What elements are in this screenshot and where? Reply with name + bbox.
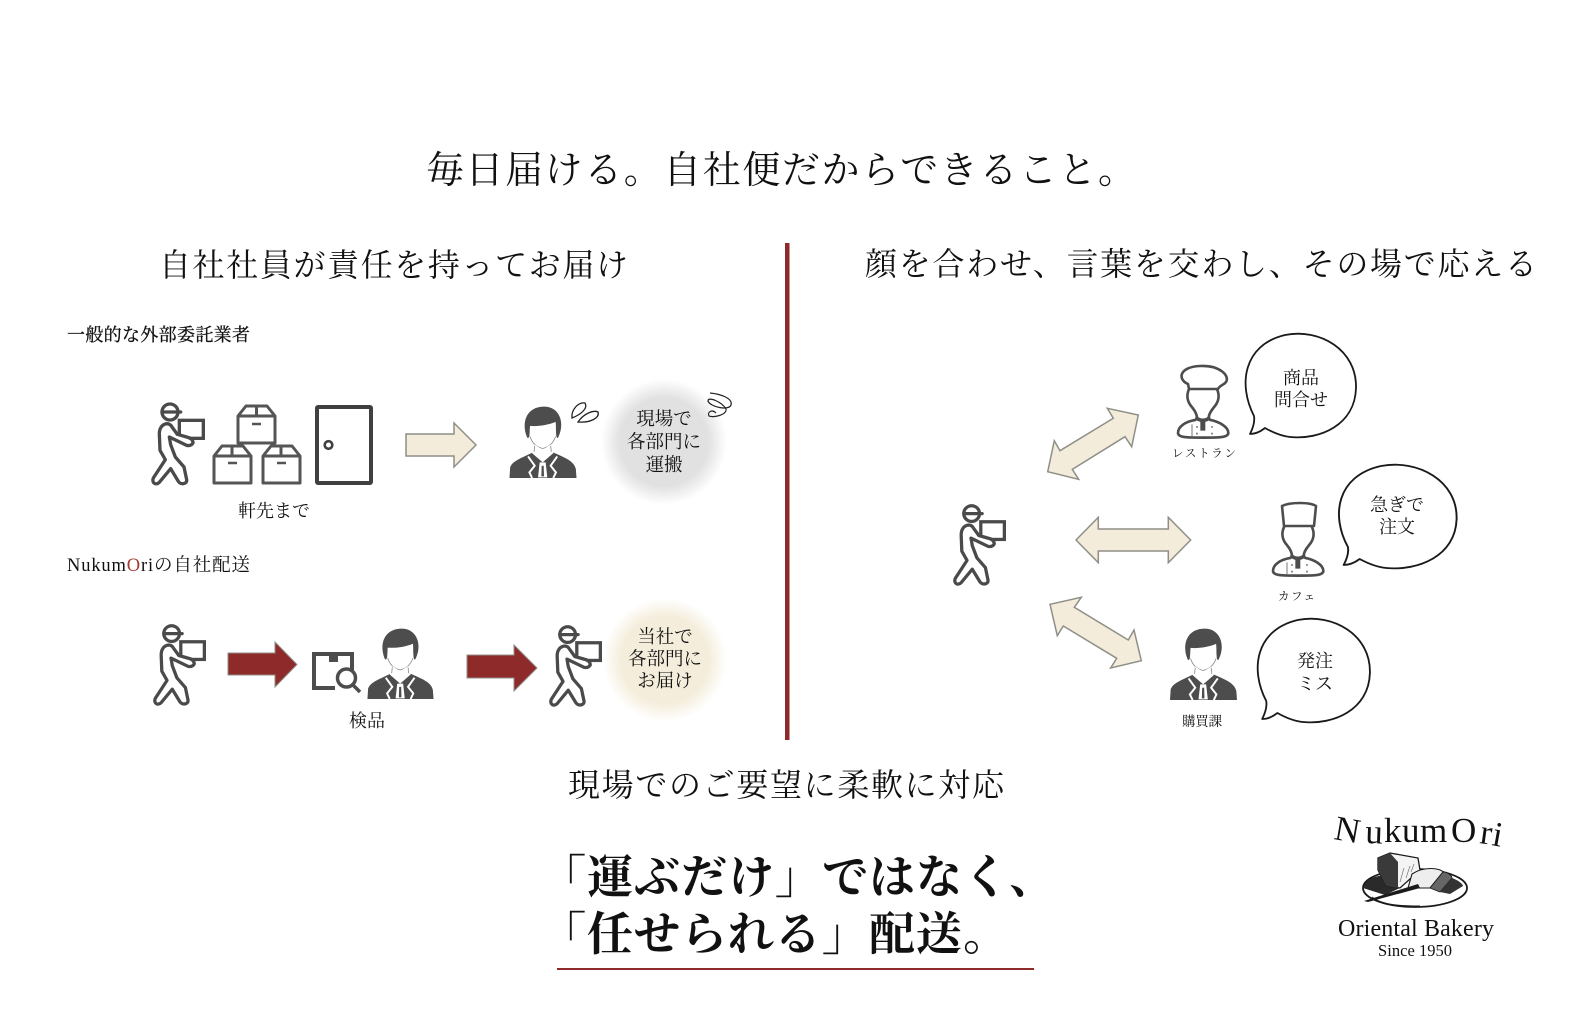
logo wordmark: r [1478, 812, 1495, 853]
headline: 「運ぶだけ」ではなく、 [540, 841, 1056, 907]
icon: delivery worker [551, 627, 600, 705]
bubble: beige deliver to each department: 当社で [637, 623, 693, 649]
caption: inspection: 検品 [349, 707, 385, 733]
divider: red vertical line [785, 243, 790, 740]
headline [540, 841, 1056, 964]
icon: sweat marks [572, 403, 598, 422]
bubble: order error [1258, 619, 1370, 722]
logo wordmark: O [1451, 811, 1476, 850]
underline [557, 968, 1034, 970]
bubble: grey carry to each department: 各部門に [627, 428, 701, 454]
icon: stacked boxes [214, 406, 300, 483]
arrow: to purchasing [1050, 597, 1141, 668]
caption: restaurant: レストラン [1172, 445, 1236, 461]
icon: cafe chef [1273, 503, 1323, 576]
bubble: order error: ミス [1297, 670, 1333, 696]
logo illustration: bread on board [1363, 853, 1467, 907]
arrow: cream [406, 423, 476, 467]
arrow: to restaurant [1048, 408, 1138, 479]
icon: inspector [367, 629, 434, 699]
bubble: grey carry to each department: 運搬 [645, 451, 683, 477]
bubble: beige deliver to each department [603, 598, 727, 722]
icon: purchasing staff [1170, 629, 1237, 700]
logo name: Oriental Bakery [1338, 916, 1494, 942]
bubble: beige deliver to each department: 各部門に [628, 645, 702, 671]
logo wordmark: k [1384, 811, 1402, 850]
title: 毎日届ける。自社便だからできること。 [426, 139, 1136, 194]
icon: troubled recipient [509, 407, 577, 478]
icon: delivery worker [955, 506, 1004, 584]
row: in-house delivery flow [155, 598, 727, 733]
icon: delivery worker [155, 626, 204, 704]
label: NukumOri in-house delivery: NukumOriの自社配送 [67, 551, 250, 577]
logo wordmark: m [1420, 811, 1447, 850]
icon: swirl [708, 393, 731, 417]
bubble: urgent order [1339, 465, 1457, 568]
caption: up to the doorstep: 軒先まで [238, 497, 310, 523]
subheading: flexible response: 現場でのご要望に柔軟に対応 [568, 760, 1006, 806]
panel: own-staff delivery [67, 240, 731, 733]
logo: NukumOri Oriental Bakery [1332, 808, 1506, 960]
bubble: product inquiry: 商品 [1283, 364, 1319, 390]
heading: right panel: 顔を合わせ、言葉を交わし、その場で応える [865, 239, 1537, 285]
logo wordmark: i [1490, 814, 1506, 855]
bubble: urgent order: 注文 [1379, 513, 1415, 539]
bubble: grey carry to each department: 現場で [636, 405, 692, 431]
caption: cafe: カフェ [1278, 588, 1315, 604]
arrow: red [228, 642, 297, 687]
bubble: grey carry to each department [601, 379, 727, 505]
logo wordmark: u [1365, 812, 1384, 852]
arrow: to cafe [1076, 517, 1191, 563]
arrow: red [467, 645, 537, 691]
icon: box inspection [314, 652, 360, 692]
bubble: product inquiry: 問合せ [1274, 386, 1328, 412]
bubble: product inquiry [1246, 334, 1356, 437]
logo since: Since 1950 [1378, 941, 1452, 960]
bubble: urgent order: 急ぎで [1370, 491, 1424, 517]
icon: delivery worker [153, 404, 203, 484]
icon: door [317, 407, 371, 483]
bubble: order error: 発注 [1297, 647, 1333, 673]
logo wordmark: u [1402, 811, 1420, 850]
caption: purchasing department: 購買課 [1182, 710, 1222, 730]
heading: left panel: 自社社員が責任を持ってお届け [159, 240, 628, 286]
logo wordmark [1332, 808, 1506, 855]
label: general outsourced carrier: 一般的な外部委託業者 [67, 321, 250, 347]
icon: restaurant chef [1178, 366, 1228, 438]
logo wordmark: N [1332, 808, 1363, 851]
bubble: beige deliver to each department: お届け [637, 667, 693, 693]
panel: face-to-face [865, 239, 1537, 730]
row: outsourced delivery flow [153, 379, 731, 523]
headline: 「任せられる」配送。 [540, 898, 1010, 964]
